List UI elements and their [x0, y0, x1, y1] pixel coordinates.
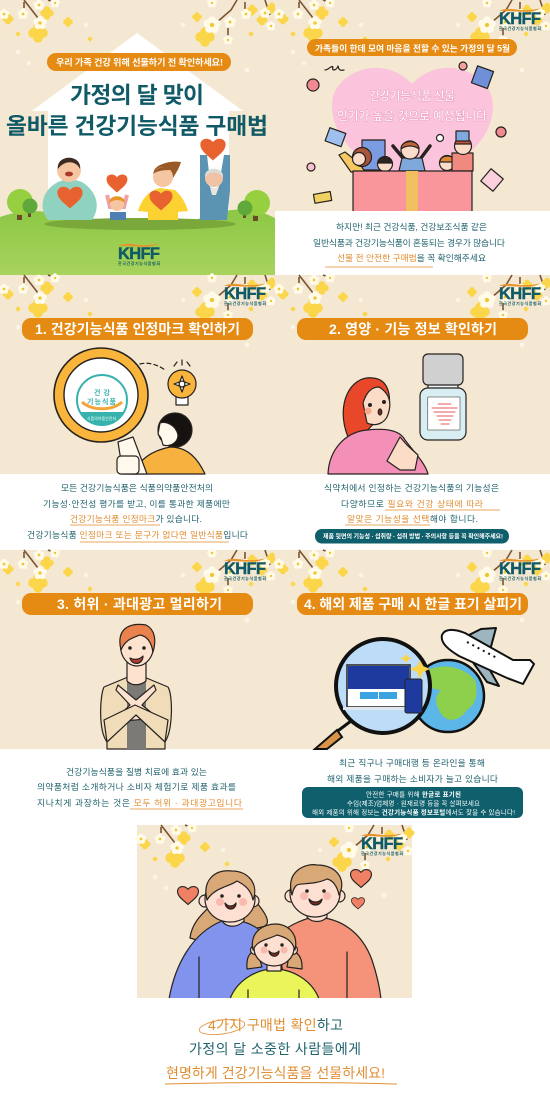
body text: 선물 전 안전한 구매법을 꼭 확인해주세요 [337, 252, 486, 263]
icon: magnifier with laptop and phone [315, 639, 430, 749]
kids in gift box [339, 131, 473, 172]
figure: man crossing arms [101, 624, 171, 749]
body text [324, 482, 500, 525]
body text: 알맞은 기능성을 선택해야 합니다. [347, 513, 478, 524]
body text: 건강기능식품을 질병 치료에 효과 있는 [66, 766, 207, 777]
body text: 식약처에서 인정하는 건강기능식품의 기능성은 [324, 482, 499, 493]
note pill: 제품 뒷면의 기능성 · 섭취량 · 섭취 방법 · 주의사항 등을 꼭 확인해주세요! [323, 532, 503, 540]
heading pill [22, 318, 253, 340]
logo [499, 8, 541, 31]
body text [37, 766, 243, 809]
subtitle pill: 우리 가족 건강 위해 선물하기 전 확인하세요! [56, 56, 223, 68]
figure: father [277, 865, 381, 999]
icon: magnifier with certification mark: 건강 [94, 388, 111, 397]
icon: magnifier with certification mark: 기능식품 [87, 397, 117, 406]
heading pill [297, 593, 528, 615]
KHFF logo [118, 243, 160, 266]
closing message: 4가지 구매법 확인하고 [208, 1017, 343, 1033]
heading pill: 1. 건강기능식품 인정마크 확인하기 [35, 321, 240, 337]
body text: 다양하므로 필요와 건강 상태에 따라 [341, 498, 483, 509]
subtitle pill: 가족들이 한데 모여 마음을 전할 수 있는 가정의 달 5월 [315, 42, 510, 54]
body text: 건강기능식품 인정마크가 있습니다. [70, 513, 202, 524]
subtitle pill [47, 53, 231, 71]
figure: grandfather with heart [200, 139, 230, 220]
figure: mother with heart [138, 162, 188, 220]
panel: step 3 [0, 548, 277, 825]
figure: father with heart [43, 158, 97, 220]
body text: 최근 직구나 구매대행 등 온라인을 통해 [339, 757, 485, 768]
note box [302, 787, 523, 818]
heading pill [297, 318, 528, 340]
family shadow [44, 218, 236, 230]
logo [499, 283, 541, 306]
icon: light bulb [140, 360, 196, 405]
panel: step 1 [0, 273, 277, 550]
closing message [165, 1017, 397, 1084]
icon: airplane [442, 628, 534, 686]
body text [327, 757, 498, 784]
body text: 건강기능식품 인정마크 또는 문구가 없다면 일반식품입니다 [27, 530, 248, 540]
figure: person with magnifier [117, 413, 205, 474]
main title: 가정의 달 맞이 [70, 82, 204, 108]
gift box [353, 171, 472, 212]
closing message: 현명하게 건강기능식품을 선물하세요! [166, 1065, 385, 1081]
logo [224, 558, 266, 581]
icon: globe [412, 660, 484, 732]
body text: 하지만! 최근 건강식품, 건강보조식품 같은 [336, 221, 487, 232]
house [32, 33, 243, 222]
panel: step 2 [274, 273, 550, 550]
main title [6, 82, 268, 139]
trees [7, 189, 270, 221]
main title: 올바른 건강기능식품 구매법 [6, 113, 268, 139]
heart text [337, 89, 487, 123]
white text area [137, 998, 412, 1100]
panel: closing [136, 823, 414, 1100]
heading pill: 2. 영양 · 기능 정보 확인하기 [329, 321, 497, 337]
grassy hills [0, 209, 275, 275]
icon: magnifier with certification mark [54, 348, 148, 442]
body text: 모든 건강기능식품은 식품의약품안전처의 [61, 482, 213, 493]
figure: woman pointing [328, 378, 428, 474]
icon: supplement bottle [420, 354, 466, 440]
body text: 일반식품과 건강기능식품이 혼동되는 경우가 많습니다 [313, 237, 505, 248]
heart text: 인기가 높을 것으로 예상됩니다 [337, 109, 487, 123]
white text area [0, 474, 275, 550]
note box: 안전한 구매를 위해 한글로 표기된 [366, 790, 461, 798]
panel: family month gift [274, 0, 550, 275]
note box: 수입(제조)업체명 · 원재료명 등을 꼭 살펴보세요 [347, 798, 480, 808]
heading pill [22, 593, 253, 615]
body text: 지나치게 과장하는 것은 모두 허위 · 과대광고입니다 [37, 797, 242, 808]
figure: daughter [230, 924, 319, 999]
note box: 해외 제품의 위해 정보는 건강기능식품 정보포털에서도 찾을 수 있습니다! [312, 808, 515, 816]
figure: girl with heart [107, 175, 127, 220]
white text area [275, 211, 550, 275]
heading pill: 3. 허위 · 과대광고 멀리하기 [57, 596, 222, 612]
panel: cover [0, 0, 277, 275]
note pill [315, 529, 509, 544]
heading pill: 4. 해외 제품 구매 시 한글 표기 살피기 [304, 596, 522, 612]
white text area [0, 749, 275, 825]
closing message: 가정의 달 소중한 사람들에게 [189, 1041, 361, 1057]
white text area [275, 474, 550, 550]
heart [332, 68, 493, 190]
body text: 의약품처럼 소개하거나 소비자 체험기로 제품 효과를 [37, 781, 236, 792]
heart text: 건강기능식품 선물 [369, 89, 455, 103]
hearts [178, 870, 371, 909]
body text: 해외 제품을 구매하는 소비자가 늘고 있습니다 [327, 773, 498, 784]
logo [224, 283, 266, 306]
decorations: gifts and petals [307, 62, 506, 203]
logo [361, 833, 403, 856]
white text area [275, 749, 550, 825]
body text [27, 482, 248, 542]
subtitle pill [307, 39, 517, 56]
logo [499, 558, 541, 581]
figure: mother [169, 871, 272, 999]
icon: magnifier with certification mark: 식품의약품안전처 [87, 416, 116, 421]
panel: step 4 [274, 548, 550, 825]
body text: 기능성·안전성 평가를 받고, 이를 통과한 제품에만 [43, 499, 230, 509]
body text [313, 221, 505, 267]
